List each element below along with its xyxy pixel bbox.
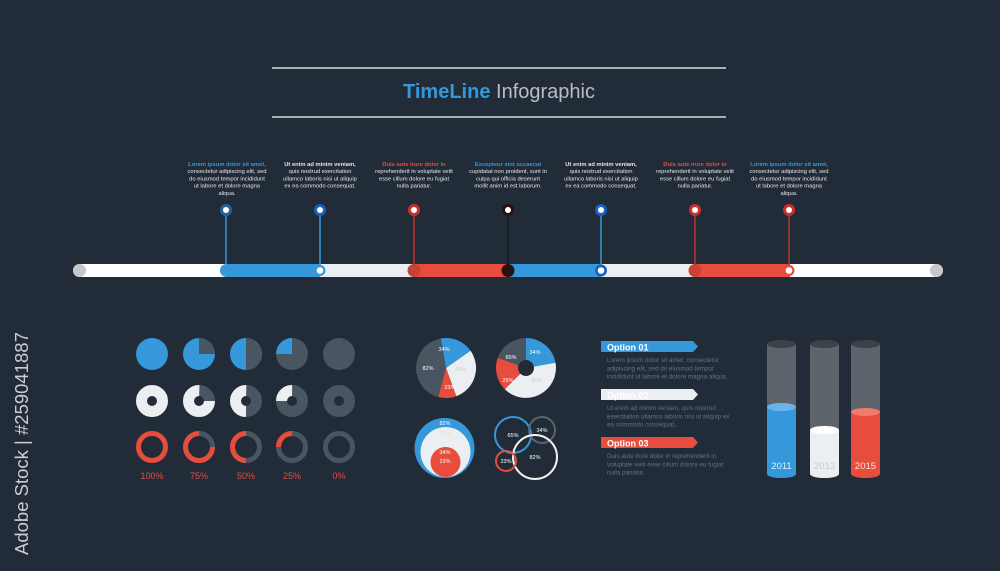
timeline text blocks: aliqua.: [218, 191, 236, 197]
cylinder 2015: 2015: [855, 461, 876, 472]
timeline text blocks: quis nostrud exercitation: [570, 169, 632, 175]
pie chart 2 donut: 34%: [529, 350, 541, 356]
row: rings: [138, 434, 352, 460]
percentage labels: 75%: [190, 471, 208, 481]
timeline text blocks: cupidatat non proident, sunt in: [469, 169, 547, 175]
timeline text blocks: quis nostrud exercitation: [289, 169, 351, 175]
percentage circle grid: [136, 338, 355, 481]
timeline text blocks: esse cillum dolore eu fugiat: [379, 176, 450, 182]
timeline text blocks: do eiusmod tempor incididunt: [189, 176, 265, 182]
pie chart 1: 34%: [438, 347, 450, 353]
timeline bar: [73, 264, 943, 277]
timeline text blocks: consectetur adipiscing elit, sed: [750, 169, 828, 175]
nested circles chart: 23%: [439, 459, 451, 465]
pie chart 1: 82%: [422, 366, 434, 372]
venn circles: 82%: [529, 455, 541, 461]
timeline markers: [220, 204, 795, 277]
venn circles: [495, 417, 557, 479]
timeline text blocks: ut labore et dolore magna: [756, 184, 823, 190]
pie chart 1: 23%: [444, 385, 456, 391]
option 01: adipiscing elit, sed do eiusmod tempor: [607, 365, 714, 372]
nested circles chart: [414, 418, 474, 478]
timeline text blocks: do eiusmod tempor incididunt: [751, 176, 827, 182]
option 01: Lorem ipsum dolor sit amet, consectetur: [607, 357, 719, 364]
timeline text blocks: reprehenderit in voluptate velit: [656, 169, 734, 175]
pie chart 2 donut: 82%: [531, 378, 543, 384]
timeline text blocks: ut labore et dolore magna: [194, 184, 261, 190]
venn circles: 23%: [500, 459, 512, 465]
option 02: Ut enim ad minim veniam, quis nostrud: [607, 405, 716, 412]
option 03: voluptate velit esse cillum dolore eu fugiat: [607, 461, 724, 468]
timeline text blocks: Duis aute irure dolor in: [663, 162, 727, 168]
pie chart 2 donut: 25%: [502, 378, 514, 384]
option 02: exercitation ullamco laboris nisi ut aliquip ex: [607, 413, 730, 420]
timeline text blocks: ullamco laboris nisi ut aliquip: [283, 176, 357, 182]
option 03: Duis aute irure dolor in reprehenderit in: [607, 453, 717, 460]
timeline text blocks: esse cillum dolore eu fugiat: [660, 176, 731, 182]
timeline text blocks: Lorem ipsum dolor sit amet,: [750, 162, 828, 168]
pie chart 2 donut: 65%: [505, 355, 517, 361]
pie chart 1: [416, 338, 476, 398]
nested circles chart: 34%: [439, 450, 451, 456]
timeline text blocks: Lorem ipsum dolor sit amet,: [188, 162, 266, 168]
option 03: nulla pariatur.: [607, 470, 645, 477]
timeline text blocks: aliqua.: [780, 191, 798, 197]
option 02: [601, 389, 730, 429]
timeline text blocks: ullamco laboris nisi ut aliquip: [564, 176, 638, 182]
timeline text blocks: Ut enim ad minim veniam,: [565, 162, 637, 168]
pie chart 2 donut: [496, 338, 556, 398]
percentage labels: [140, 471, 346, 481]
nested circles chart: 82%: [439, 421, 451, 427]
option 01: incididunt ut labore et dolore magna aliqua.: [607, 374, 728, 381]
percentage labels: 50%: [237, 471, 255, 481]
option 02: Option 02: [607, 390, 649, 400]
row: pies: [136, 338, 355, 370]
option 03: Option 03: [607, 438, 649, 448]
option 03: [601, 437, 724, 477]
timeline text blocks: Excepteur sint occaecat: [475, 162, 541, 168]
cylinder chart: [767, 340, 880, 478]
nested circles chart: 65%: [439, 431, 451, 437]
timeline text blocks: culpa qui officia deserunt: [476, 176, 540, 182]
timeline text blocks: reprehenderit in voluptate velit: [375, 169, 453, 175]
vertical watermark text: Adobe Stock | #259041887: [11, 332, 32, 555]
timeline text blocks: consectetur adipiscing elit, sed: [188, 169, 266, 175]
timeline text blocks: Ut enim ad minim veniam,: [284, 162, 356, 168]
timeline text blocks: nulla pariatur.: [678, 184, 713, 190]
row: donuts: [142, 390, 350, 412]
title: TimeLine Infographic: [403, 81, 595, 103]
option 01: [601, 341, 728, 381]
timeline text blocks: [188, 162, 828, 197]
cylinder 2011: 2011: [771, 461, 792, 472]
timeline text blocks: ex ea commodo consequat.: [284, 184, 356, 190]
timeline text blocks: mollit anim id est laborum.: [474, 184, 542, 190]
percentage labels: 0%: [332, 471, 346, 481]
timeline text blocks: nulla pariatur.: [397, 184, 432, 190]
timeline text blocks: ex ea commodo consequat.: [565, 184, 637, 190]
timeline text blocks: Duis aute irure dolor in: [382, 162, 446, 168]
venn circles: 65%: [507, 433, 519, 439]
percentage labels: 25%: [283, 471, 301, 481]
pie chart 1: 65%: [455, 367, 467, 373]
venn circles: 34%: [536, 428, 548, 434]
cylinder 2013: 2013: [814, 461, 835, 472]
percentage labels: 100%: [140, 471, 164, 481]
option 01: Option 01: [607, 342, 649, 352]
option 02: ea commodo consequat.: [607, 422, 676, 429]
